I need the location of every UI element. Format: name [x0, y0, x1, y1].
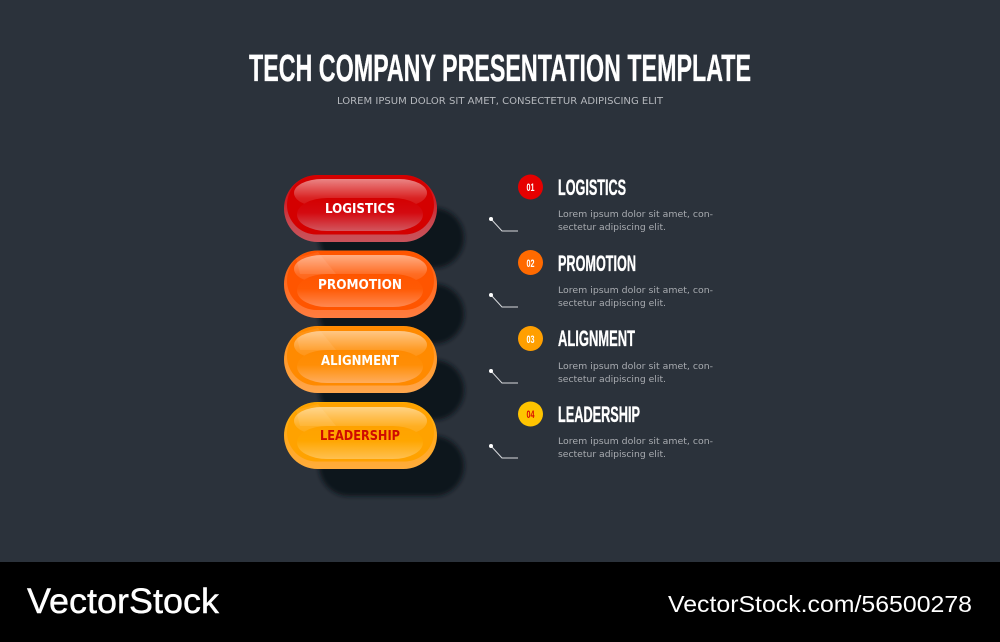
number badge 02: 02	[526, 258, 534, 270]
heading: LEADERSHIP	[558, 402, 640, 427]
description: sectetur adipiscing elit.	[558, 223, 666, 233]
item 02: promotion	[489, 250, 713, 309]
connector	[489, 369, 518, 383]
footer logo: VectorStock	[27, 582, 220, 621]
label: promotion: PROMOTION	[318, 278, 402, 293]
number badge 01: 01	[526, 182, 534, 194]
footer bar	[0, 562, 1000, 642]
item 04: leadership	[489, 402, 713, 460]
number badge 04	[518, 402, 543, 426]
subtitle: LOREM IPSUM DOLOR SIT AMET, CONSECTETUR ADIPISCING ELIT	[337, 96, 664, 107]
label: leadership: LEADERSHIP	[320, 429, 400, 444]
pill: leadership	[284, 402, 437, 469]
connector	[489, 444, 518, 458]
pill: promotion	[284, 250, 437, 318]
item 01: logistics	[489, 174, 713, 233]
number badge 03	[518, 326, 543, 351]
description: Lorem ipsum dolor sit amet, con-	[558, 437, 713, 447]
label: logistics: LOGISTICS	[325, 202, 395, 217]
description: sectetur adipiscing elit.	[558, 299, 666, 309]
heading: PROMOTION	[558, 251, 636, 276]
number badge 03: 03	[526, 334, 534, 346]
item 03: alignment	[489, 326, 713, 385]
heading: ALIGNMENT	[558, 326, 635, 351]
number badge 01	[518, 174, 543, 200]
number badge 02	[518, 250, 543, 275]
connector	[489, 293, 518, 307]
label: alignment: ALIGNMENT	[321, 354, 399, 369]
heading: LOGISTICS	[558, 175, 626, 200]
description: sectetur adipiscing elit.	[558, 375, 666, 385]
pill: logistics	[284, 175, 437, 242]
connector	[489, 217, 518, 231]
description: Lorem ipsum dolor sit amet, con-	[558, 286, 713, 296]
description: Lorem ipsum dolor sit amet, con-	[558, 210, 713, 220]
footer url: VectorStock.com/56500278	[668, 591, 972, 617]
description: sectetur adipiscing elit.	[558, 450, 666, 460]
pill shadows	[319, 208, 464, 496]
pill: alignment	[284, 326, 437, 393]
description: Lorem ipsum dolor sit amet, con-	[558, 362, 713, 372]
number badge 04: 04	[526, 409, 535, 421]
